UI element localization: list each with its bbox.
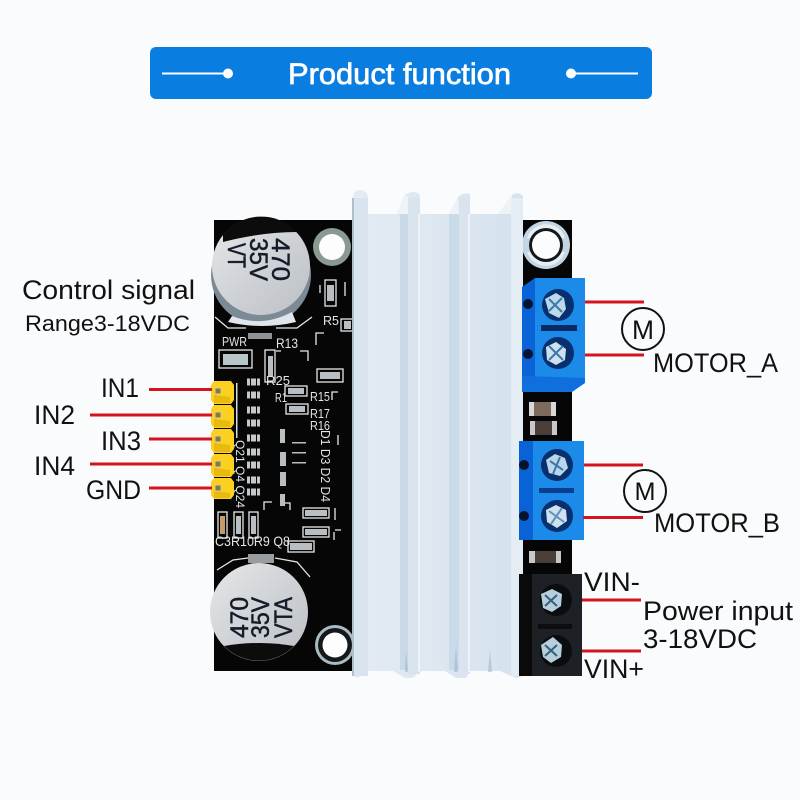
motor A label and symbol	[585, 302, 778, 378]
input pin labels and leader lines: GND	[86, 475, 141, 505]
silkscreen labels: C3R10R9 Q8	[215, 533, 290, 549]
blue terminal block: MOTOR_A	[522, 278, 585, 392]
screw	[542, 289, 574, 321]
power input labels: Power input	[643, 596, 794, 626]
silkscreen labels: D1 D3 D2 D4	[318, 430, 333, 502]
motor B label and symbol	[583, 465, 780, 538]
capacitor top: VT	[222, 243, 250, 268]
control signal label: Control signal	[22, 275, 195, 305]
surface mount resistors	[220, 285, 351, 563]
capacitor bottom	[210, 563, 308, 661]
heat sink	[352, 190, 523, 678]
motor B label and symbol: MOTOR_B	[654, 508, 780, 538]
control signal label	[22, 275, 195, 336]
title banner: Product function	[288, 58, 511, 91]
screw	[540, 635, 572, 667]
black terminal block: power	[519, 574, 582, 676]
silkscreen labels: R16	[310, 418, 330, 433]
silkscreen labels: R17	[310, 406, 330, 421]
input pin labels and leader lines: IN1	[101, 373, 139, 403]
title banner	[150, 47, 652, 99]
capacitor top: 470	[266, 238, 294, 281]
silkscreen labels: R25	[266, 373, 290, 388]
capacitor top: 35V	[244, 238, 272, 281]
input pin labels and leader lines	[34, 373, 212, 505]
silkscreen labels: Q21 Q4 Q24	[233, 440, 247, 508]
screw	[541, 449, 573, 481]
power input labels: 3-18VDC	[643, 624, 757, 654]
screw	[540, 584, 572, 616]
capacitor bottom: 35V	[247, 597, 275, 638]
power input labels: VIN+	[584, 654, 644, 684]
input pin labels and leader lines: IN2	[34, 400, 75, 430]
mounting hole bottom left	[315, 625, 355, 665]
circuit board	[214, 220, 572, 671]
motor A label and symbol: M	[632, 315, 654, 345]
silkscreen labels: R1	[275, 390, 287, 405]
capacitor bottom: 470	[226, 597, 254, 638]
input pin labels and leader lines: IN4	[34, 451, 75, 481]
mounting hole top right	[522, 221, 570, 269]
power input labels: VIN-	[584, 567, 640, 597]
screw	[541, 500, 573, 532]
silkscreen labels: R13	[276, 335, 298, 351]
motor B label and symbol: M	[634, 478, 656, 506]
blue terminal block: MOTOR_B	[519, 441, 584, 540]
control signal label: Range3-18VDC	[25, 311, 190, 336]
silkscreen labels: R5	[323, 313, 339, 328]
screw	[542, 337, 574, 369]
power input labels	[582, 567, 794, 684]
silkscreen component outlines	[215, 280, 353, 577]
ceramic capacitors	[529, 402, 561, 563]
capacitor top	[211, 217, 311, 326]
input pin labels and leader lines: IN3	[101, 426, 141, 456]
yellow pin header	[211, 381, 238, 499]
mounting hole top left	[313, 228, 351, 266]
silkscreen labels: R15	[310, 389, 330, 404]
silkscreen labels	[215, 313, 339, 549]
motor A label and symbol: MOTOR_A	[653, 348, 778, 378]
silkscreen labels: PWR	[222, 334, 247, 349]
capacitor bottom: VTA	[270, 597, 298, 638]
